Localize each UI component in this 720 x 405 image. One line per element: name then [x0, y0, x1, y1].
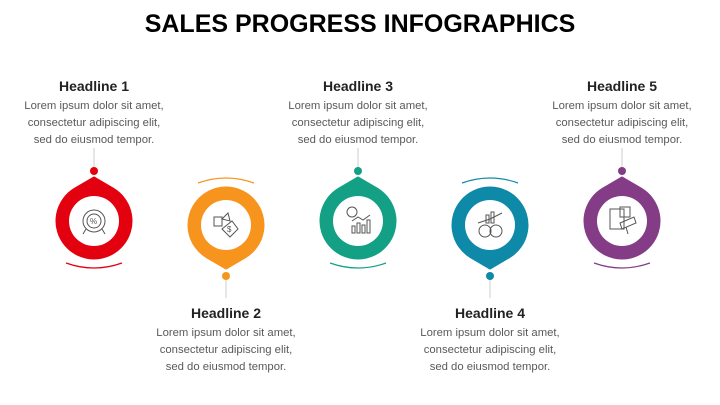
text block: headline 1: consectetur adipiscing elit,: [28, 117, 160, 129]
text block: headline 4: Headline 4: [455, 305, 525, 321]
text block: headline 5: [552, 78, 692, 146]
text block: headline 3: Headline 3: [323, 78, 393, 94]
text block: headline 1: sed do eiusmod tempor.: [34, 134, 154, 146]
marker 2 orange: $: [227, 225, 232, 234]
marker 1 red: [57, 148, 131, 268]
text block: headline 2: [156, 305, 296, 373]
text block: headline 3: [288, 78, 428, 146]
text block: headline 5: Lorem ipsum dolor sit amet,: [552, 100, 692, 112]
text block: headline 5: consectetur adipiscing elit,: [556, 117, 688, 129]
text block: headline 5: sed do eiusmod tempor.: [562, 134, 682, 146]
text block: headline 4: [420, 305, 560, 373]
text block: headline 1: [24, 78, 164, 146]
text block: headline 4: consectetur adipiscing elit,: [424, 344, 556, 356]
text block: headline 2: Headline 2: [191, 305, 261, 321]
text block: headline 3: Lorem ipsum dolor sit amet,: [288, 100, 428, 112]
text block: headline 1: Headline 1: [59, 78, 129, 94]
text block: headline 2: Lorem ipsum dolor sit amet,: [156, 327, 296, 339]
marker 5 purple: [585, 148, 659, 268]
marker 4 blue: [453, 178, 527, 298]
text block: headline 2: sed do eiusmod tempor.: [166, 361, 286, 373]
marker 2 orange: [189, 178, 263, 298]
text block: headline 5: Headline 5: [587, 78, 657, 94]
marker 1 red: %: [90, 217, 97, 226]
marker 3 green: [321, 148, 395, 268]
text block: headline 4: Lorem ipsum dolor sit amet,: [420, 327, 560, 339]
text block: headline 2: consectetur adipiscing elit,: [160, 344, 292, 356]
text block: headline 4: sed do eiusmod tempor.: [430, 361, 550, 373]
text block: headline 1: Lorem ipsum dolor sit amet,: [24, 100, 164, 112]
title: SALES PROGRESS INFOGRAPHICS: [145, 10, 575, 38]
text block: headline 3: consectetur adipiscing elit,: [292, 117, 424, 129]
text block: headline 3: sed do eiusmod tempor.: [298, 134, 418, 146]
